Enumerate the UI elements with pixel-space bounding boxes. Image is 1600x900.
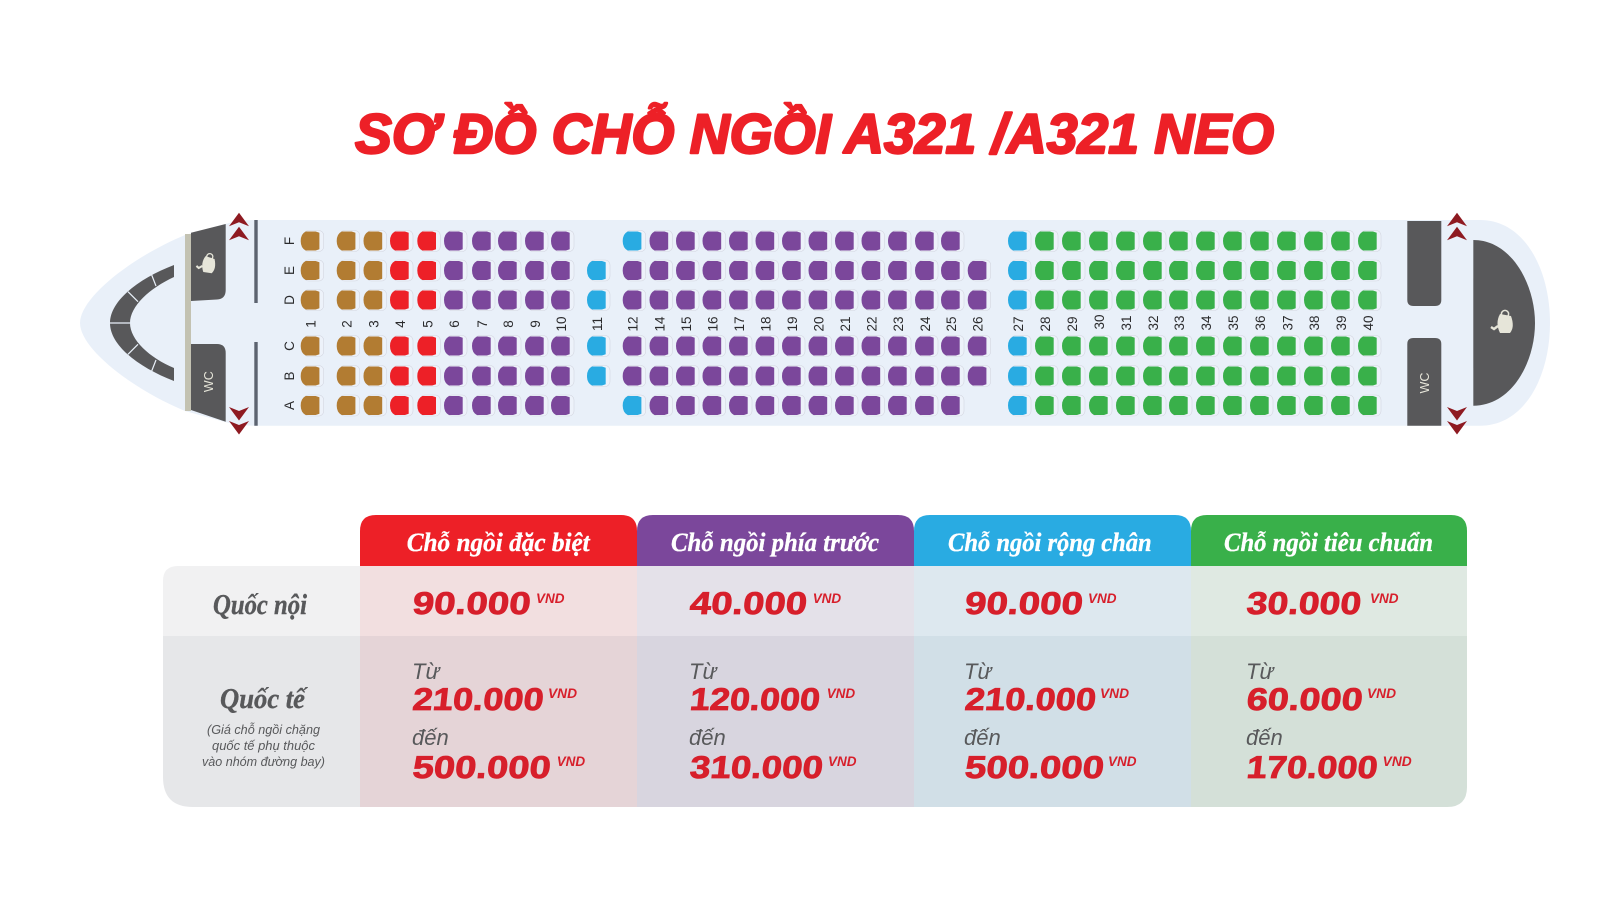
row label: international: Quốc tế <box>220 683 308 715</box>
international price: legroom: 500.000 <box>963 749 1106 785</box>
cockpit seat arc <box>110 265 174 381</box>
international price: front: 120.000 <box>688 681 822 717</box>
seats: red rows 4-5 <box>390 230 440 416</box>
row numbers: 16 <box>706 316 720 332</box>
domestic price: standard: VND <box>1370 591 1399 606</box>
seats: brown rows 1-3 <box>301 230 386 416</box>
international price: standard: 60.000 <box>1245 681 1365 717</box>
row numbers: 17 <box>732 316 747 332</box>
row letters: F <box>282 237 297 245</box>
arrow: rear exit up <box>1447 213 1467 240</box>
front WC <box>191 344 226 422</box>
header: special seats <box>360 515 637 566</box>
row numbers: 7 <box>475 320 490 328</box>
international price: standard: Từ <box>1246 659 1275 684</box>
international price: legroom <box>914 636 1191 807</box>
row numbers: 24 <box>918 316 933 332</box>
row numbers: 21 <box>838 316 853 332</box>
row numbers: 3 <box>366 320 382 328</box>
row letters <box>282 237 297 410</box>
international price: legroom: VND <box>1100 686 1129 701</box>
row numbers: 28 <box>1038 316 1053 332</box>
domestic price: standard: 30.000 <box>1245 585 1363 621</box>
row letters: C <box>282 341 297 351</box>
column: legroom seats <box>914 515 1191 807</box>
international price: special: Từ <box>412 659 441 684</box>
row numbers: 35 <box>1226 315 1241 331</box>
row numbers: 26 <box>971 316 986 332</box>
row numbers: 37 <box>1280 315 1296 331</box>
row numbers: 6 <box>447 320 462 328</box>
row numbers: 38 <box>1307 315 1322 331</box>
row label: international <box>163 636 360 807</box>
row numbers: 10 <box>554 316 569 332</box>
international price: special: 210.000 <box>411 681 546 717</box>
front bulkhead <box>185 234 191 411</box>
row numbers: 22 <box>864 316 880 332</box>
row numbers: 40 <box>1361 315 1376 331</box>
domestic price: special: VND <box>536 591 565 606</box>
row numbers: 29 <box>1065 316 1080 332</box>
row numbers: 36 <box>1253 315 1268 331</box>
panel: price table <box>163 515 1467 807</box>
domestic price: front: VND <box>813 591 841 606</box>
icon: front galley cup <box>196 252 217 274</box>
rear galley <box>1473 240 1535 406</box>
row numbers: 5 <box>420 320 435 328</box>
seats: purple rows 6-10 <box>444 230 574 416</box>
seats: purple rows 12-26 <box>623 230 991 416</box>
rear lavatory upper <box>1407 221 1441 306</box>
domestic price: legroom <box>914 566 1191 636</box>
header: standard seats: Chỗ ngồi tiêu chuẩn <box>1224 528 1433 557</box>
domestic price: special: 90.000 <box>411 585 533 621</box>
row letters: A <box>282 401 297 410</box>
column: front seats <box>637 515 914 807</box>
column: special seats <box>360 515 637 807</box>
seats: blue row 27 <box>1008 230 1031 416</box>
rear WC <box>1407 338 1441 426</box>
international price: standard: 170.000 <box>1245 749 1380 785</box>
rear WC label: WC <box>1418 373 1432 393</box>
domestic price: legroom: 90.000 <box>963 585 1085 621</box>
row numbers: 1 <box>304 320 319 328</box>
row label: international: vào nhóm đường bay) <box>202 755 325 769</box>
row numbers: 2 <box>340 320 355 328</box>
seats: green rows 28-40 <box>1035 230 1381 416</box>
icon: rear galley cup <box>1491 310 1513 333</box>
row numbers: 32 <box>1146 315 1161 331</box>
international price: special <box>360 636 637 807</box>
international price: standard <box>1191 636 1467 807</box>
fuselage outline <box>80 220 1550 426</box>
panel: aircraft seat map <box>80 213 1550 434</box>
international price: special: VND <box>557 754 585 769</box>
arrow: front exit up <box>229 213 249 240</box>
seats: blue row 11 <box>587 260 610 386</box>
international price: front: VND <box>827 686 855 701</box>
front WC label: WC <box>202 371 216 392</box>
row numbers: 18 <box>758 316 774 332</box>
arrow: rear exit down <box>1447 407 1467 434</box>
row numbers: 23 <box>891 316 906 332</box>
front door walls <box>254 220 258 426</box>
arrow: front exit down <box>229 407 249 434</box>
title: SƠ ĐỒ CHỖ NGỒI A321 /A321 NEO <box>355 102 1274 165</box>
header: front seats: Chỗ ngồi phía trước <box>671 528 879 557</box>
domestic price: legroom: VND <box>1088 591 1117 606</box>
header: front seats <box>637 515 914 566</box>
row label: international: (Giá chỗ ngồi chặng <box>207 722 320 737</box>
row letters: B <box>282 371 297 381</box>
row numbers: 19 <box>785 316 800 332</box>
international price: special: đến <box>412 725 449 750</box>
row numbers <box>304 314 1376 332</box>
domestic price: standard <box>1191 566 1467 636</box>
row letters: E <box>282 266 297 275</box>
international price: front <box>637 636 914 807</box>
row numbers: 4 <box>393 320 408 328</box>
international price: standard: VND <box>1367 686 1396 701</box>
row numbers: 14 <box>652 316 668 332</box>
international price: standard: đến <box>1246 725 1283 750</box>
international price: front: 310.000 <box>688 749 825 785</box>
international price: front: đến <box>689 725 726 750</box>
column: standard seats <box>1191 515 1467 807</box>
row numbers: 39 <box>1334 315 1349 331</box>
row numbers: 8 <box>501 320 516 328</box>
domestic price: front <box>637 566 914 636</box>
row numbers: 27 <box>1011 316 1026 332</box>
international price: front: VND <box>828 754 857 769</box>
row label: domestic <box>163 566 360 636</box>
international price: standard: VND <box>1383 754 1412 769</box>
row letters: D <box>282 295 297 305</box>
row label: domestic: Quốc nội <box>213 589 307 621</box>
international price: legroom: Từ <box>964 659 993 684</box>
row numbers: 25 <box>944 316 959 332</box>
international price: special: 500.000 <box>411 749 553 785</box>
row numbers: 20 <box>812 316 826 332</box>
front galley <box>191 224 226 301</box>
row numbers: 30 <box>1092 314 1107 330</box>
header: special seats: Chỗ ngồi đặc biệt <box>407 528 590 557</box>
international price: front: Từ <box>689 659 718 684</box>
header: legroom seats <box>914 515 1191 566</box>
row numbers: 33 <box>1172 315 1187 331</box>
international price: legroom: 210.000 <box>963 681 1098 717</box>
row numbers: 11 <box>590 317 605 331</box>
row numbers: 15 <box>679 316 694 332</box>
row numbers: 12 <box>626 316 641 332</box>
domestic price: front: 40.000 <box>688 585 809 621</box>
international price: special: VND <box>548 686 577 701</box>
row numbers: 31 <box>1119 315 1134 331</box>
header: legroom seats: Chỗ ngồi rộng chân <box>948 528 1152 557</box>
row numbers: 9 <box>528 320 543 328</box>
international price: legroom: đến <box>964 725 1001 750</box>
seats: blue row 12 window <box>623 230 646 416</box>
domestic price: special <box>360 566 637 636</box>
row label: international: quốc tế phụ thuộc <box>212 739 316 753</box>
row numbers: 34 <box>1199 315 1214 331</box>
international price: legroom: VND <box>1108 754 1137 769</box>
header: standard seats <box>1191 515 1467 566</box>
